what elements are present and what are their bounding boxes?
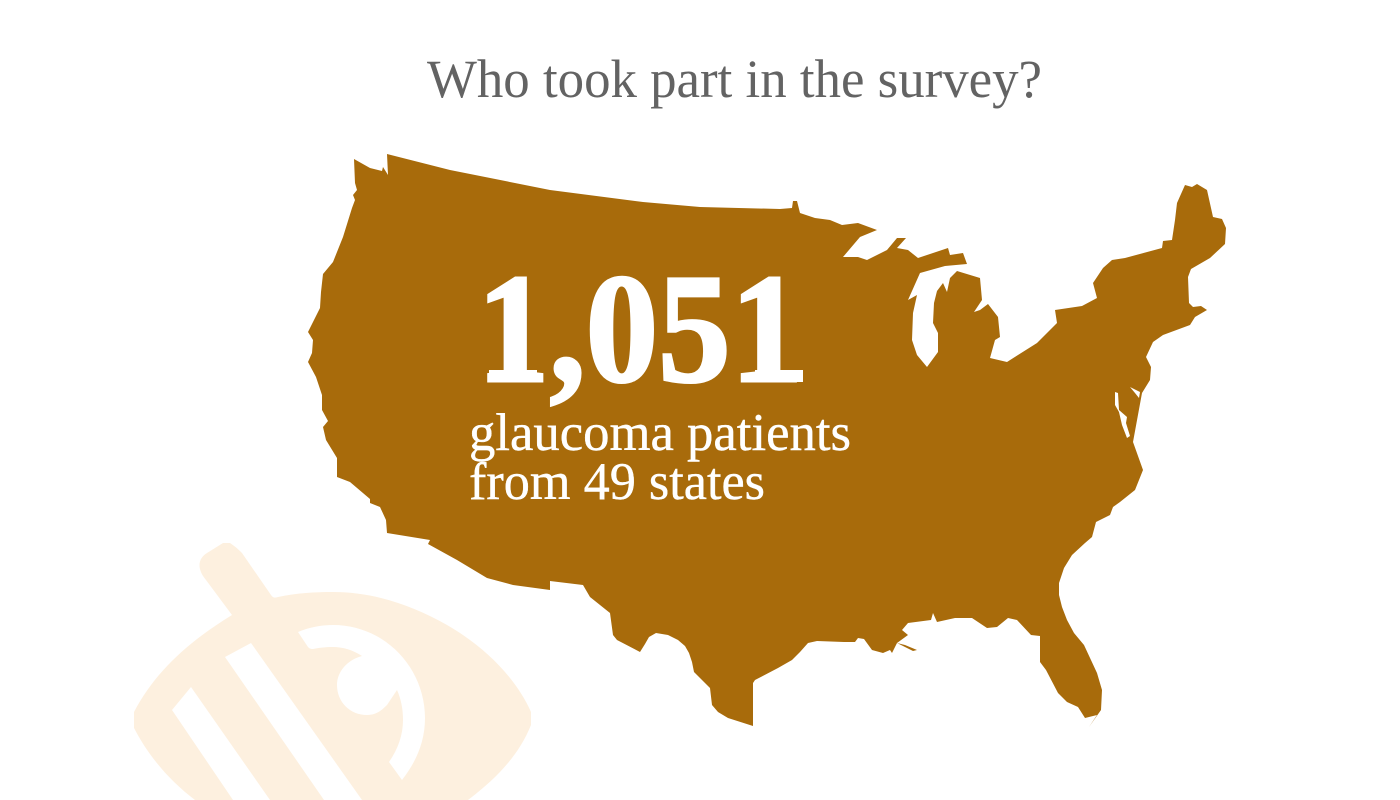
map detail: Chesapeake Bay	[1115, 387, 1140, 438]
headline number: 1,051	[477, 242, 803, 415]
description text	[469, 404, 851, 511]
description text: from 49 states	[469, 453, 765, 511]
description text: glaucoma patients	[469, 404, 851, 462]
map: contiguous United States silhouette	[308, 154, 1226, 727]
icon: crossed-out eye watermark	[134, 543, 531, 800]
title: Who took part in the survey?	[427, 49, 1042, 109]
